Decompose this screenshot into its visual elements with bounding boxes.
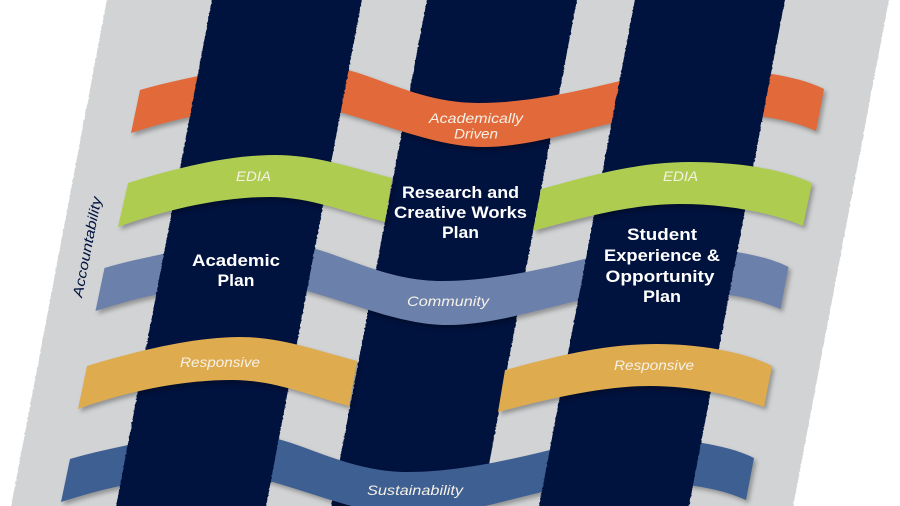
ribbon: responsive right: Responsive — [614, 357, 694, 373]
ribbon: EDIA left — [118, 155, 392, 227]
heading: academic plan — [192, 251, 280, 290]
ribbon: EDIA right — [533, 162, 812, 231]
ribbon: responsive left — [78, 337, 357, 409]
heading: student experience and opportunity plan — [604, 225, 720, 306]
heading: student experience and opportunity plan: Experience & — [604, 246, 720, 265]
column: research and creative works — [330, 0, 578, 506]
column: student experience and opportunity plan — [538, 0, 786, 506]
ribbon: community: Community — [407, 293, 490, 309]
ribbon: responsive right — [498, 344, 772, 412]
heading: academic plan: Academic — [192, 251, 280, 270]
ribbon: EDIA left: EDIA — [236, 168, 271, 184]
label: accountability: Accountability — [69, 194, 105, 300]
ribbon: community — [96, 241, 788, 325]
ribbon: academically driven — [131, 63, 824, 147]
heading: research and creative works plan: Plan — [442, 223, 479, 242]
ribbon: responsive left: Responsive — [180, 354, 260, 370]
ribbon: academically driven: Driven — [454, 126, 498, 142]
ribbon: EDIA right: EDIA — [663, 168, 698, 184]
heading: research and creative works plan — [394, 183, 527, 242]
ribbon: sustainability: Sustainability — [367, 482, 464, 498]
heading: research and creative works plan: Research and — [402, 183, 519, 202]
heading: academic plan: Plan — [218, 271, 254, 290]
heading: student experience and opportunity plan: Student — [627, 225, 697, 244]
ribbon: sustainability — [61, 432, 754, 506]
heading: student experience and opportunity plan: Opportunity — [606, 267, 715, 286]
heading: student experience and opportunity plan: Plan — [643, 287, 681, 306]
column: academic plan — [115, 0, 363, 506]
ribbon: academically driven: Academically — [428, 110, 524, 126]
heading: research and creative works plan: Creative Works — [394, 203, 527, 222]
